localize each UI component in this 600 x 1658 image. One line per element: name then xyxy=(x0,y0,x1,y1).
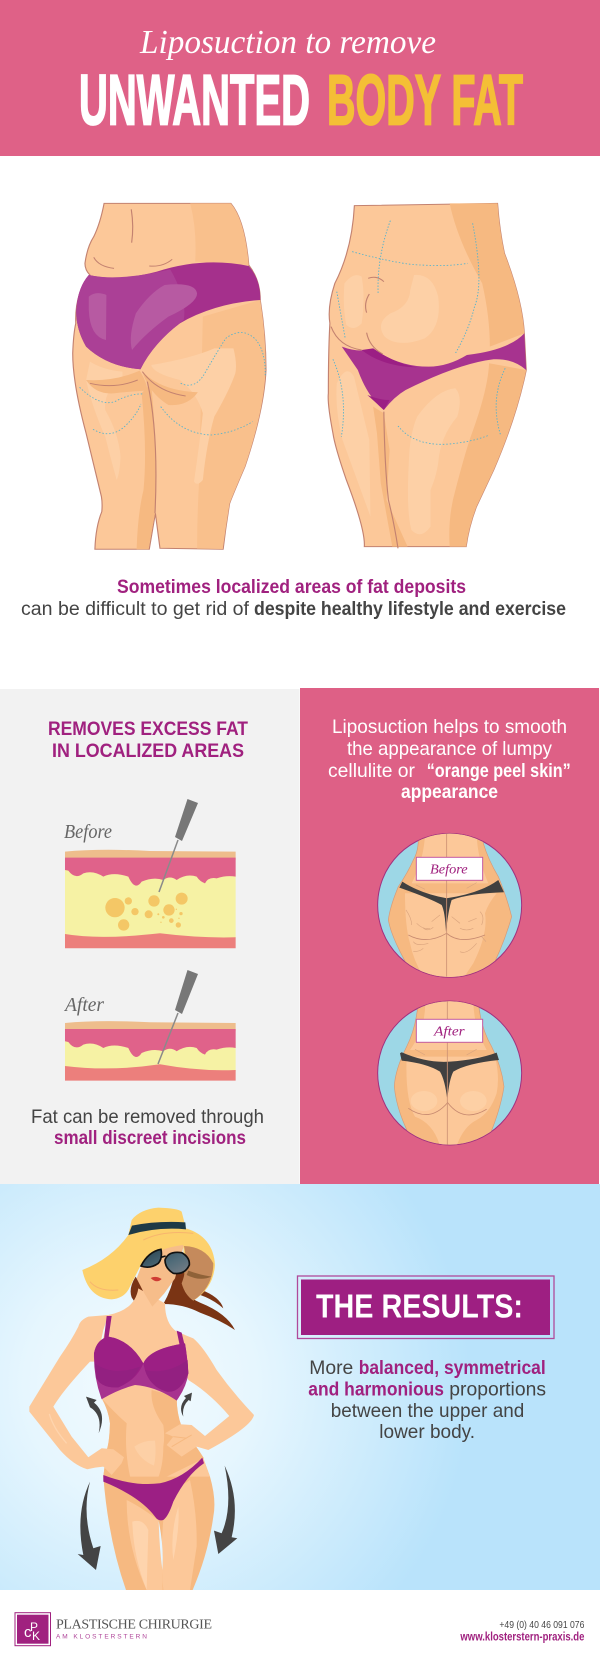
label box: after xyxy=(416,1019,483,1042)
panel text: “orange peel skin” xyxy=(427,760,571,782)
panel caption xyxy=(31,1106,264,1149)
panel caption: Fat can be removed through xyxy=(31,1106,264,1128)
legs xyxy=(103,1458,214,1590)
intro text xyxy=(21,577,566,620)
results text: and harmonious xyxy=(308,1378,444,1400)
footer contact xyxy=(460,1619,585,1644)
label: before: Before xyxy=(64,821,112,843)
panel heading: REMOVES EXCESS FAT xyxy=(48,718,248,740)
chest, neck and torso xyxy=(100,1288,210,1477)
sunglasses xyxy=(141,1249,189,1274)
panel caption: small discreet incisions xyxy=(54,1127,246,1149)
results text: proportions xyxy=(449,1378,546,1400)
title line: unwanted body fat: UNWANTED xyxy=(79,62,310,140)
briefs xyxy=(76,262,260,369)
results text: lower body. xyxy=(379,1421,475,1443)
circle: after xyxy=(378,1000,522,1146)
label box: before: Before xyxy=(430,863,468,878)
title line: Liposuction to remove: Liposuction to remove xyxy=(139,24,436,61)
footer logo xyxy=(15,1613,212,1646)
panel text: the appearance of lumpy xyxy=(347,738,552,760)
label box: before xyxy=(416,857,483,880)
footer logo: K xyxy=(32,1629,40,1643)
practice name: PLASTISCHE CHIRURGIE xyxy=(56,1618,212,1633)
panel heading xyxy=(48,718,248,762)
results text: balanced, symmetrical xyxy=(359,1357,546,1379)
briefs xyxy=(342,333,526,410)
panel heading: IN LOCALIZED AREAS xyxy=(52,740,244,762)
face xyxy=(137,1245,184,1307)
panel: removes excess fat xyxy=(0,689,300,1184)
bikini bottom xyxy=(103,1458,204,1520)
hat xyxy=(82,1208,215,1301)
arms xyxy=(29,1315,124,1475)
panel text xyxy=(328,716,571,803)
diagram: skin layers after xyxy=(65,1021,236,1081)
results badge xyxy=(298,1276,554,1338)
diagram: skin layers before xyxy=(65,850,236,948)
illustration: woman in bikini and sun hat xyxy=(29,1208,254,1590)
hair behind xyxy=(131,1263,235,1330)
header banner xyxy=(0,0,600,156)
results text xyxy=(308,1357,546,1443)
intro text: Sometimes localized areas of fat deposits xyxy=(117,577,466,598)
arrows xyxy=(78,1393,237,1570)
lips xyxy=(151,1277,162,1281)
label box: after: After xyxy=(433,1025,465,1040)
illustration: body, rear view with marked fat areas xyxy=(73,203,266,549)
practice subtitle: AM KLOSTERSTERN xyxy=(56,1634,147,1641)
panel text: appearance xyxy=(401,781,498,803)
label: after: After xyxy=(63,994,104,1016)
footer logo: P xyxy=(30,1620,38,1634)
footer logo: c xyxy=(24,1624,32,1641)
torso shading xyxy=(102,1390,204,1483)
intro text: despite healthy lifestyle and exercise xyxy=(254,599,566,620)
intro text: can be difficult to get rid of xyxy=(21,599,250,620)
panel text: Liposuction helps to smooth xyxy=(332,716,567,738)
results badge: THE RESULTS: xyxy=(316,1288,523,1325)
bikini top xyxy=(104,1316,185,1347)
panel text: cellulite or xyxy=(328,760,415,782)
results text: between the upper and xyxy=(331,1400,524,1422)
icon: cannula after xyxy=(158,970,198,1064)
results text: More xyxy=(309,1357,353,1379)
illustration: body, three-quarter view with marked fat areas xyxy=(328,203,526,548)
footer contact: +49 (0) 40 46 091 076 xyxy=(499,1619,585,1631)
icon: cannula before xyxy=(159,799,198,892)
panel: the results xyxy=(0,1184,600,1590)
circle: before xyxy=(378,832,522,978)
panel: cellulite smoothing xyxy=(300,688,599,1184)
